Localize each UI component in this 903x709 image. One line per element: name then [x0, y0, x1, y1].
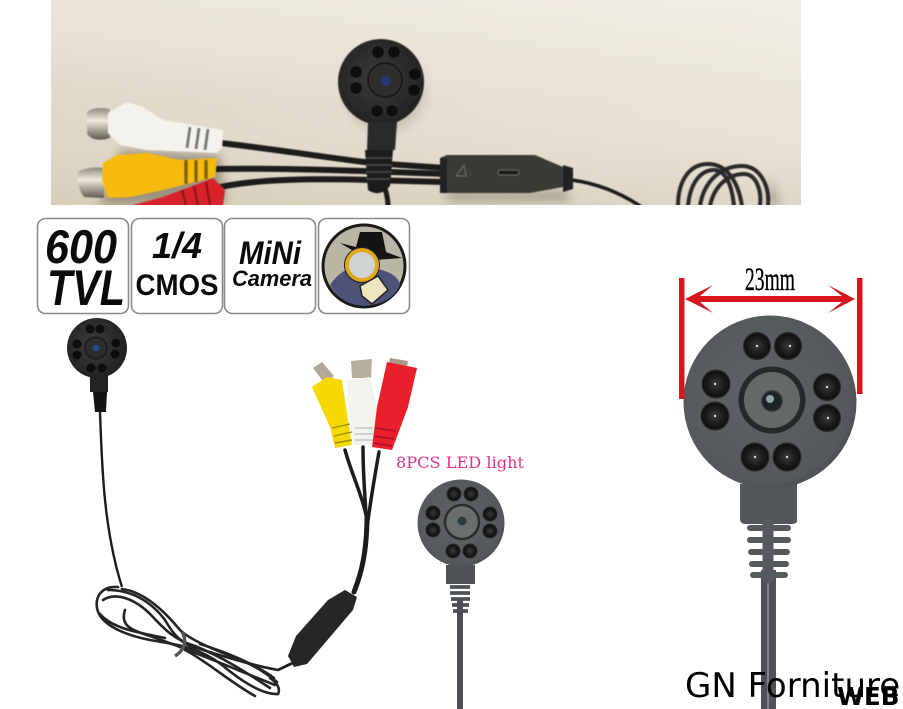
cable coil	[97, 587, 290, 696]
badge: 600 TVL: TVL	[47, 260, 125, 316]
small camera detail	[418, 480, 504, 709]
top photo cable coil	[678, 164, 768, 206]
badge: MiNi Camera: Camera	[232, 266, 312, 291]
large camera with 23mm dimension	[679, 278, 862, 709]
left photo inline control box	[278, 590, 357, 670]
label: 8PCS LED light: 8PCS LED light	[396, 453, 525, 472]
red dimension lines and arrow	[679, 278, 862, 399]
badge: 600 TVL	[38, 218, 128, 316]
left photo camera	[67, 318, 127, 412]
badge: MiNi Camera	[224, 218, 316, 314]
photo: camera and RCA plugs on beige background	[51, 0, 801, 206]
cable	[761, 570, 776, 709]
white RCA plug	[347, 359, 377, 445]
neck	[740, 484, 797, 524]
IR LEDs	[701, 332, 840, 471]
label: 23mm: 23mm	[745, 262, 795, 298]
red RCA plug	[372, 358, 417, 450]
badge: 1/4 CMOS: CMOS	[136, 269, 218, 302]
badge: 1/4 CMOS	[132, 218, 222, 314]
badge: 600 TVL: 600	[45, 220, 117, 273]
camera body	[684, 316, 856, 488]
badge: detective with magnifying glass icon	[318, 218, 410, 314]
left photo camera cable	[100, 412, 122, 587]
badge: 1/4 CMOS: 1/4	[152, 225, 202, 266]
strain relief ribs	[750, 524, 788, 578]
RCA wires	[345, 447, 379, 592]
cable tie	[175, 632, 185, 656]
top photo cables	[216, 143, 640, 206]
top photo white RCA plug	[87, 102, 223, 153]
top photo red RCA plug	[133, 178, 225, 206]
yellow RCA plug	[312, 362, 352, 448]
badge: MiNi Camera: MiNi	[239, 235, 302, 271]
watermark: GN Forniture: GN Forniture	[685, 666, 900, 706]
top photo inline control box	[440, 155, 573, 193]
lens	[738, 366, 806, 434]
left photo: camera with cable coil and RCA plugs	[67, 318, 417, 696]
top photo camera	[338, 39, 424, 193]
top photo yellow RCA plug	[78, 153, 217, 198]
